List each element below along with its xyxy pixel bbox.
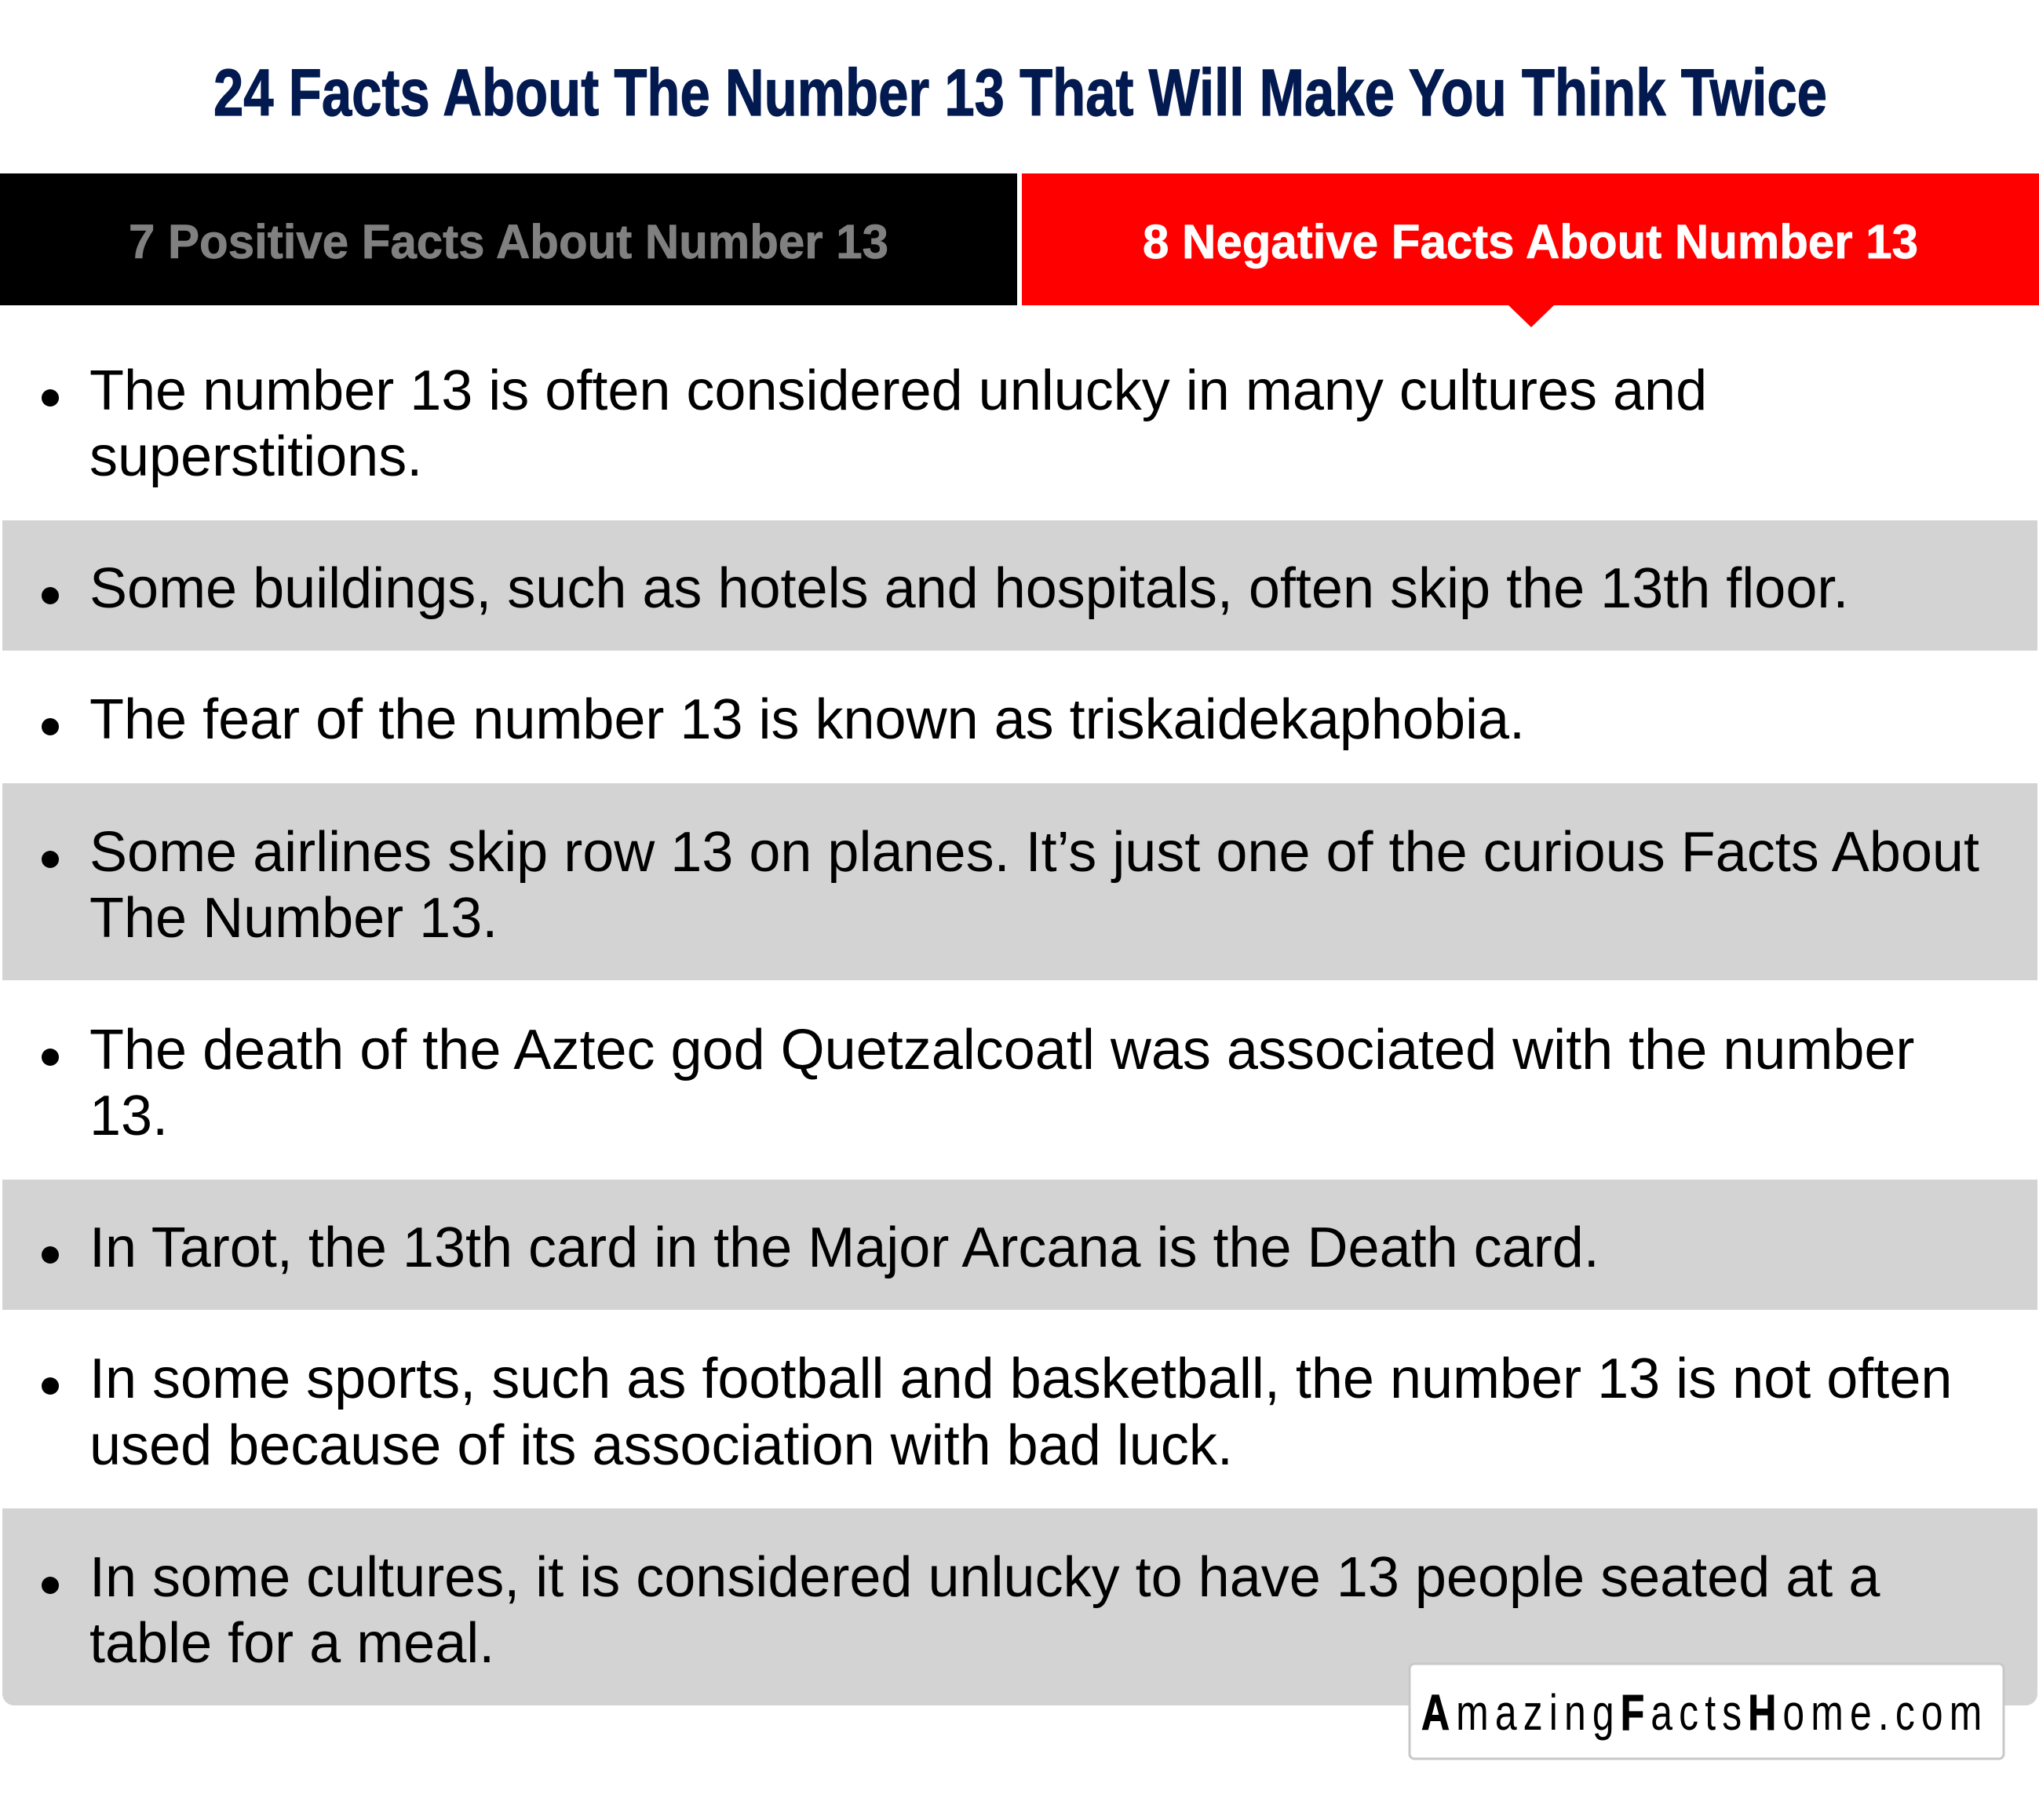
fact 8 row: In some cultures, it is considered unlucky to have 13 people seated at a xyxy=(89,1546,1880,1609)
fact 2 row xyxy=(2,520,2037,651)
fact 7 row: used because of its association with bad luck. xyxy=(89,1414,1233,1477)
fact 5 row xyxy=(42,1019,1914,1147)
fact 8 row: table for a meal. xyxy=(89,1612,494,1675)
tab: negative facts: 8 Negative Facts About Number 13 xyxy=(1143,215,1918,268)
fact 2 row: Some buildings, such as hotels and hospitals, often skip the 13th floor. xyxy=(89,557,1848,620)
fact 1 row: The number 13 is often considered unlucky in many cultures and xyxy=(89,359,1707,422)
tab: positive facts: 7 Positive Facts About Number 13 xyxy=(129,215,888,268)
fact 3 row: The fear of the number 13 is known as triskaidekaphobia. xyxy=(89,688,1525,751)
fact 8 row xyxy=(2,1508,2037,1705)
fact 5 row: The death of the Aztec god Quetzalcoatl was associated with the number xyxy=(89,1019,1914,1081)
watermark badge xyxy=(1410,1664,2004,1759)
fact 6 row xyxy=(2,1180,2037,1310)
tab: positive facts xyxy=(0,173,1017,305)
fact 7 row xyxy=(42,1348,1952,1477)
tab: negative facts xyxy=(1022,173,2039,327)
fact 4 row xyxy=(2,783,2037,980)
fact 1 row xyxy=(42,359,1707,488)
fact 4 row: Some airlines skip row 13 on planes. It’s just one of the curious Facts About xyxy=(89,821,1979,884)
fact 5 row: 13. xyxy=(89,1085,168,1147)
fact 4 row: The Number 13. xyxy=(89,887,498,950)
watermark badge: AmazingFactsHome.com xyxy=(1421,1685,1988,1741)
fact 7 row: In some sports, such as football and basketball, the number 13 is not often xyxy=(89,1348,1952,1410)
fact 6 row: In Tarot, the 13th card in the Major Arcana is the Death card. xyxy=(89,1216,1599,1279)
fact 1 row: superstitions. xyxy=(89,425,422,488)
